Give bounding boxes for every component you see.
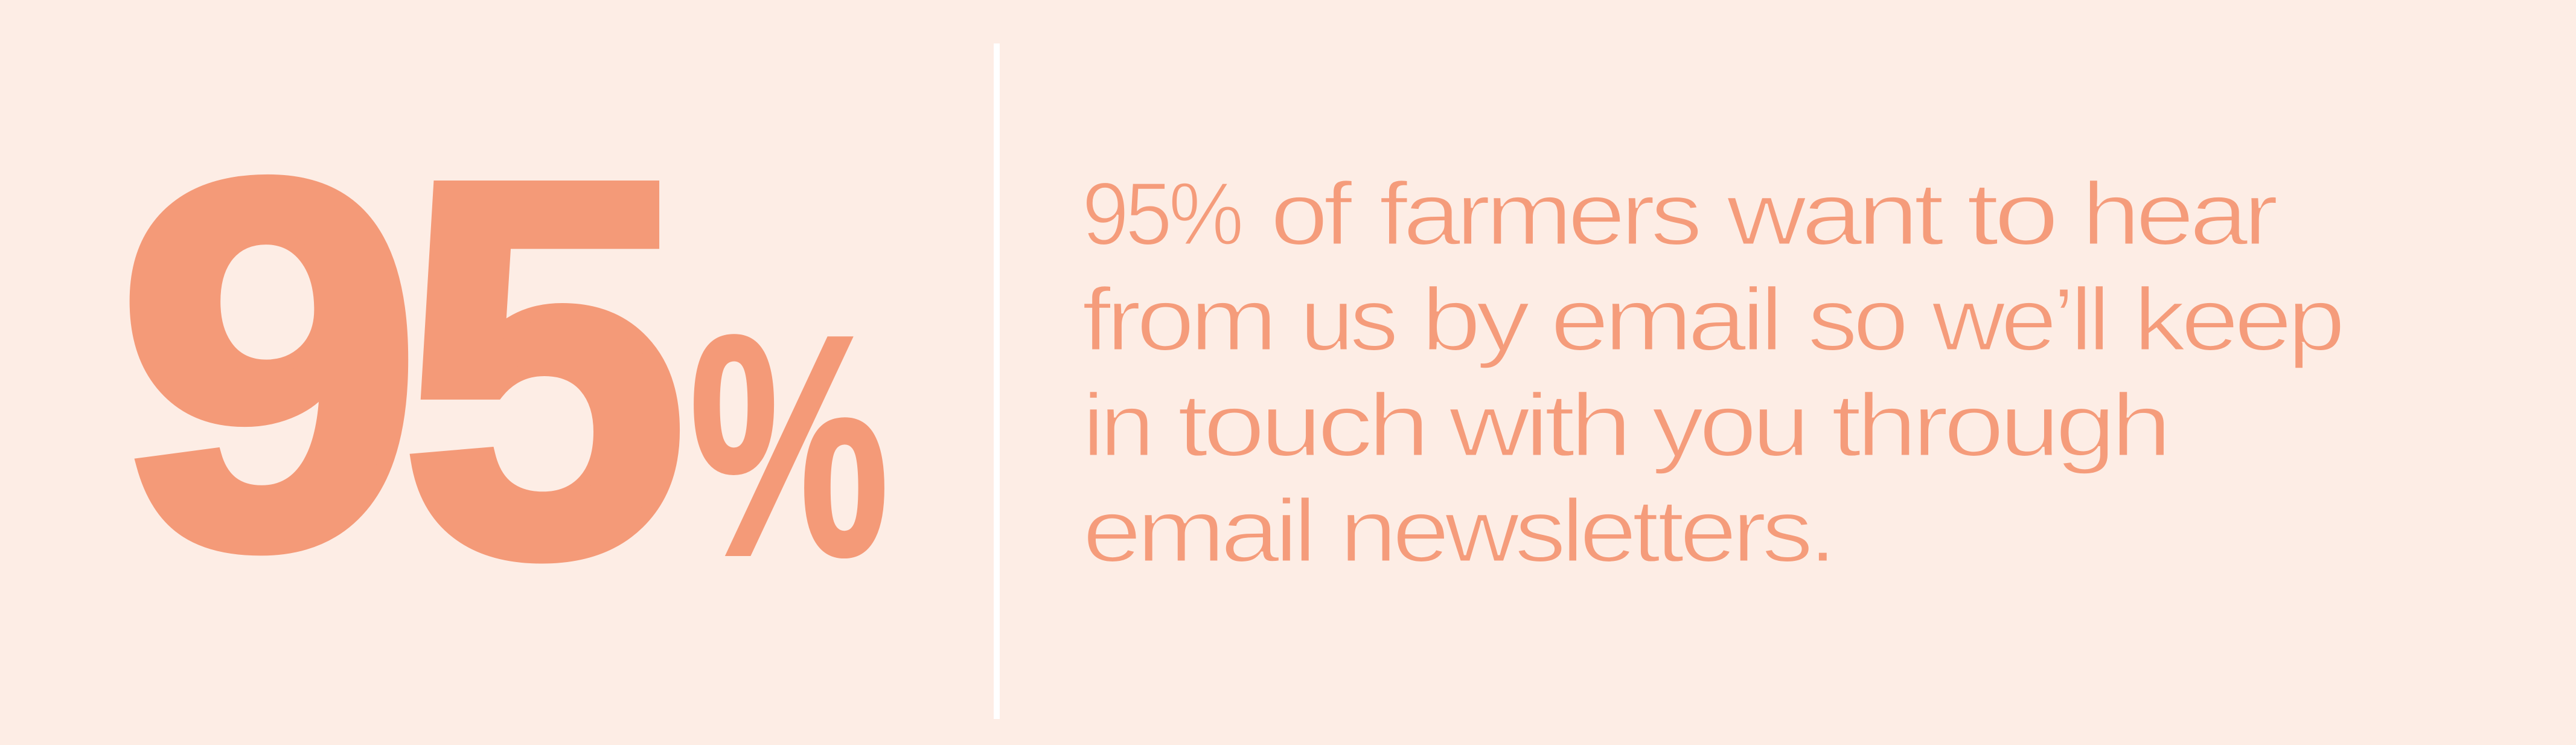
word: of: of bbox=[1270, 164, 1353, 264]
word: with: with bbox=[1448, 376, 1627, 475]
word: keep: keep bbox=[2133, 270, 2342, 369]
word: want: want bbox=[1726, 164, 1945, 264]
word: to: to bbox=[1966, 164, 2055, 264]
divider line bbox=[994, 43, 1000, 719]
word: you: you bbox=[1652, 376, 1805, 475]
word: we'll: we’ll bbox=[1931, 270, 2106, 369]
digit 9: 9 bbox=[118, 75, 421, 653]
word: farmers: farmers bbox=[1379, 164, 1699, 264]
word: so: so bbox=[1807, 270, 1905, 369]
big statistic: 95% bbox=[118, 73, 889, 663]
word: by: by bbox=[1421, 270, 1530, 369]
word: touch: touch bbox=[1177, 376, 1425, 475]
digit 5: 5 bbox=[402, 73, 687, 663]
word: hear: hear bbox=[2082, 164, 2277, 264]
statement text block bbox=[1082, 164, 2342, 581]
word: from: from bbox=[1082, 270, 1273, 369]
word: in: in bbox=[1082, 376, 1150, 475]
percent sign: % bbox=[689, 270, 889, 621]
word: through: through bbox=[1831, 376, 2167, 475]
word: 95%: 95% bbox=[1082, 164, 1241, 264]
word: us: us bbox=[1300, 270, 1395, 369]
word: newsletters.: newsletters. bbox=[1340, 481, 1832, 581]
word: email (second): email bbox=[1082, 481, 1312, 581]
word: email: email bbox=[1550, 270, 1779, 369]
